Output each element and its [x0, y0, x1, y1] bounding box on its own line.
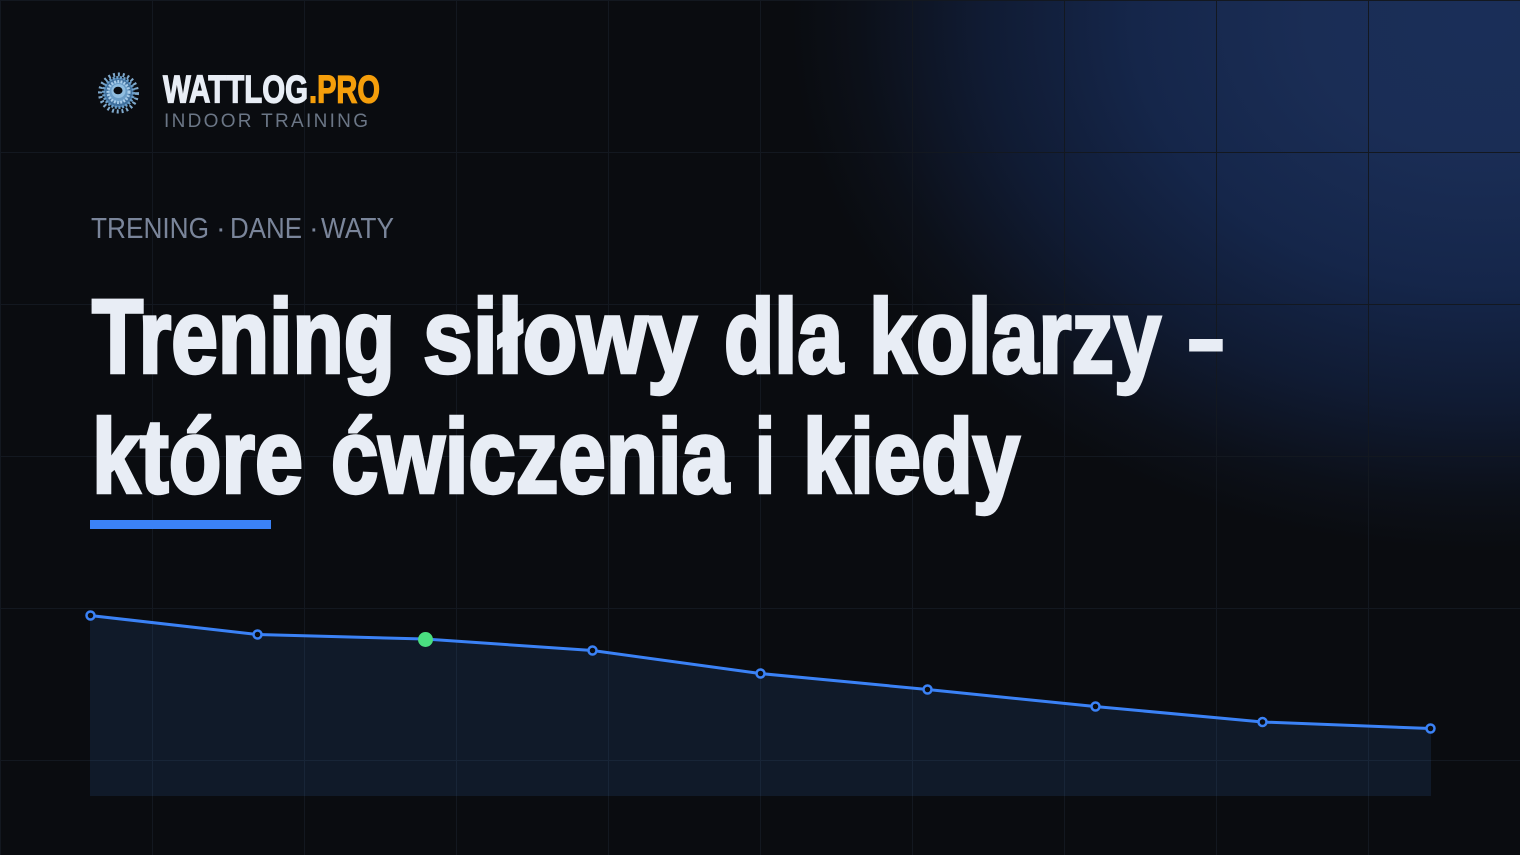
title line 1: - — [1184, 278, 1228, 396]
highlighted point — [418, 632, 433, 647]
title line 2: kiedy — [803, 398, 1020, 516]
eyebrow text: · — [216, 213, 226, 245]
title line 2 — [92, 398, 1020, 516]
logo tagline: INDOOR TRAINING — [164, 111, 368, 132]
title line 1 — [92, 278, 1228, 396]
title line 1: dla — [724, 278, 844, 396]
logo wordmark: .PRO — [309, 68, 380, 112]
eyebrow text: WATY — [321, 213, 394, 245]
title line 1: siłowy — [423, 278, 697, 396]
title line 2: i — [755, 398, 775, 516]
title line 2: ćwiczenia — [331, 398, 730, 516]
chart points — [86, 612, 1434, 732]
logo — [100, 68, 380, 132]
icon: cassette gear — [100, 74, 137, 112]
chart line — [90, 616, 1430, 728]
eyebrow text: DANE — [230, 213, 302, 245]
title accent underline — [90, 520, 271, 529]
title line 1: kolarzy — [869, 278, 1161, 396]
title line 1: Trening — [92, 278, 395, 396]
eyebrow text: · — [309, 213, 319, 245]
title — [92, 278, 1228, 516]
eyebrow text: TRENING — [91, 213, 209, 245]
logo wordmark: WATTLOG — [163, 68, 308, 112]
eyebrow text — [91, 213, 394, 245]
chart area fill — [90, 616, 1431, 796]
line chart — [86, 612, 1434, 796]
title line 2: które — [92, 398, 303, 516]
